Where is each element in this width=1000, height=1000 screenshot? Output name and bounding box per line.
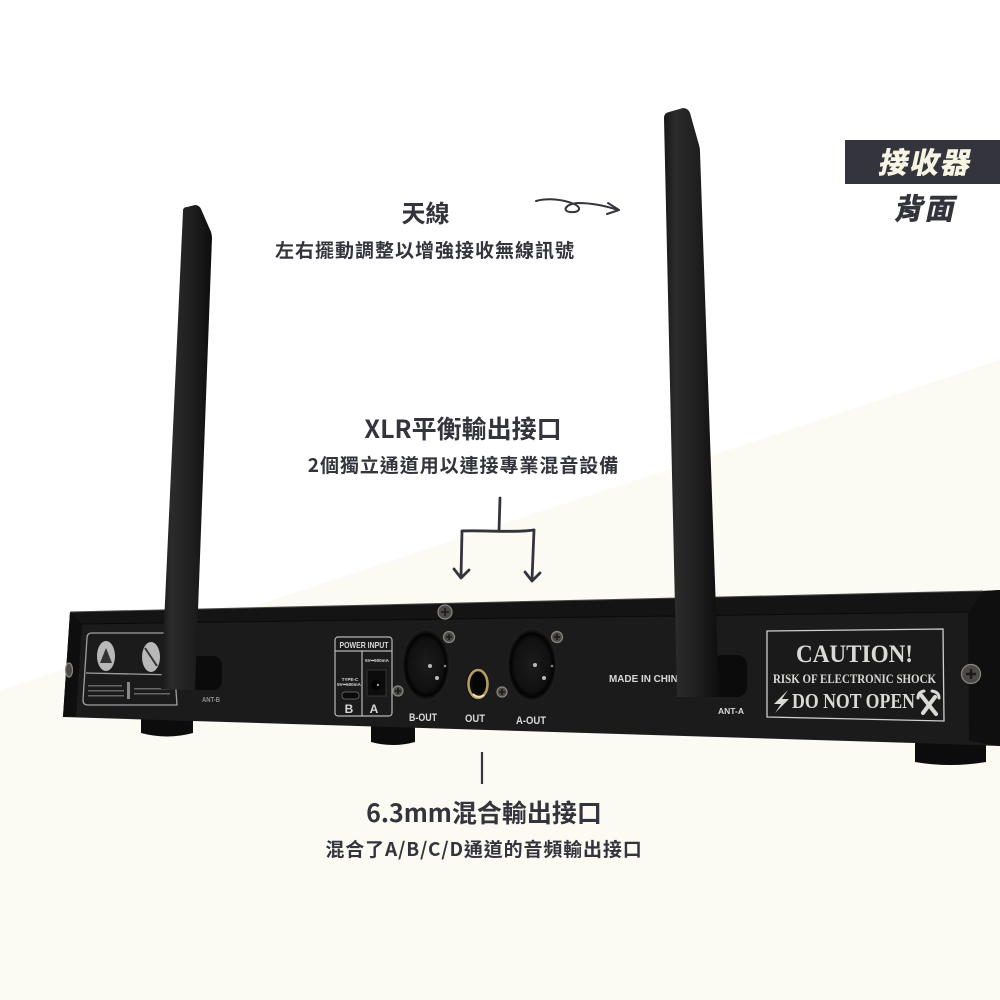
badge: receiver xyxy=(845,140,1000,184)
connector: A-OUT XLR xyxy=(507,628,557,702)
panel: power input: 5V⎓500mA xyxy=(365,658,390,663)
text block: XLR output: XLR平衡輸出接口 xyxy=(364,410,562,446)
port labels: A-OUT xyxy=(516,715,546,727)
panel: safety label xyxy=(83,633,177,705)
panel: caution label: RISK OF ELECTRONIC SHOCK xyxy=(773,672,936,686)
panel: power input: POWER INPUT xyxy=(340,641,388,650)
port labels: OUT xyxy=(465,713,485,725)
text block: 6.3mm output xyxy=(325,794,643,862)
panel: caution label xyxy=(767,629,944,721)
panel: power input: TYPE-C xyxy=(342,677,359,682)
text block: XLR output xyxy=(308,410,619,478)
heading: back side: 背面 xyxy=(892,186,962,228)
badge: receiver: 接收器 xyxy=(876,140,978,182)
text block: antenna: 天線 xyxy=(402,194,450,229)
device feet xyxy=(141,718,986,765)
panel: caution label: CAUTION! xyxy=(796,641,913,668)
connector: antenna A base xyxy=(712,655,747,697)
panel: power input: B xyxy=(345,702,354,716)
antenna: right xyxy=(664,108,719,697)
text block: 6.3mm output: 6.3mm混合輸出接口 xyxy=(366,794,602,830)
panel: power input: 5V⎓500mA xyxy=(337,682,362,687)
divider: 6.3mm pointer xyxy=(481,752,483,784)
text block: antenna: 左右擺動調整以增強接收無線訊號 xyxy=(275,236,575,263)
device body xyxy=(63,590,1000,746)
arrow: antenna pointer xyxy=(536,199,619,214)
port labels xyxy=(409,674,744,727)
port labels: ANT-A xyxy=(718,706,744,716)
text block: XLR output: 2個獨立通道用以連接專業混音設備 xyxy=(308,451,619,478)
screws xyxy=(66,605,980,697)
connector: 6.3mm OUT jack xyxy=(466,668,488,700)
panel: power input xyxy=(335,637,392,716)
arrow: XLR split xyxy=(454,498,540,581)
connector: antenna B base xyxy=(188,656,222,690)
port labels: MADE IN CHINA xyxy=(609,674,685,685)
screw slots xyxy=(395,608,976,695)
label: ANT-B: ANT-B xyxy=(202,697,220,704)
antenna: left xyxy=(161,205,212,690)
panel: power input: A xyxy=(370,702,379,716)
text block: 6.3mm output: 混合了A/B/C/D通道的音頻輸出接口 xyxy=(325,835,643,862)
panel: caution label: DO NOT OPEN xyxy=(792,689,915,713)
text block: antenna xyxy=(275,194,575,263)
connector: B-OUT XLR xyxy=(402,629,450,701)
port labels: B-OUT xyxy=(409,712,437,724)
